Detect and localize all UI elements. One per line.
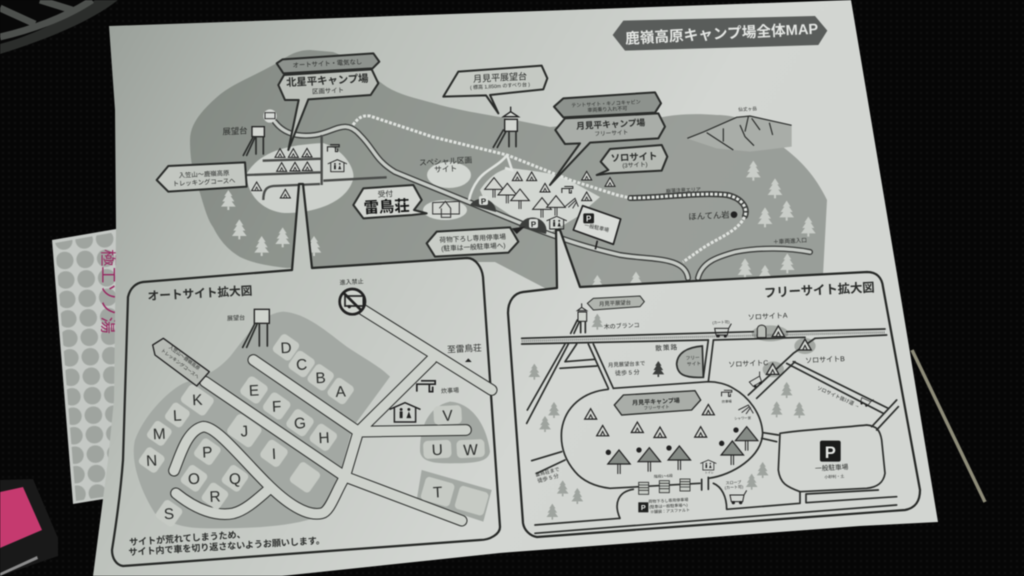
tag: 月見平展望台: 月見平展望台	[599, 298, 632, 308]
tag: site types: 車両乗り入れ不可	[587, 105, 627, 114]
tag: trekking course: 入笠山〜鹿嶺高原	[178, 168, 230, 180]
site letters: I	[271, 446, 277, 463]
tag: 月見平キャンプ場: 月見平キャンプ場	[632, 396, 680, 407]
site letters	[146, 340, 479, 523]
label: shower: シャワー室	[734, 415, 752, 421]
icon: shower	[738, 405, 753, 414]
site letters: K	[192, 392, 204, 409]
tower: 北星平 展望台	[243, 127, 264, 155]
heading: フリーサイト拡大図	[764, 279, 875, 300]
tag: unloading parking	[427, 227, 525, 257]
label: swing: 木のブランコ	[604, 321, 640, 331]
parking semicircles	[470, 196, 547, 234]
tower	[571, 303, 587, 333]
site letters: U	[431, 442, 443, 459]
label: kitchen: 炊事場	[722, 398, 732, 404]
right half map details	[485, 16, 827, 295]
overall map	[190, 50, 827, 296]
label: toilet: トイレ	[705, 470, 714, 475]
tag: 月見平キャンプ場: フリーサイト	[594, 129, 628, 138]
main road	[275, 122, 810, 278]
tents: 月見平	[512, 171, 615, 201]
label: special site: サイト	[434, 164, 457, 174]
site access roads	[527, 338, 898, 473]
unloading parking label: 荷物下ろし専用停車場	[648, 496, 688, 504]
tag: 月見平展望台	[443, 66, 547, 113]
label: walk to 雷鳥荘: 雷鳥荘まで	[534, 466, 560, 479]
label: walk to 雷鳥荘: 徒歩 5 分	[536, 471, 560, 485]
label: slope: スロープ	[725, 479, 741, 485]
label: caution area: 崩落注意エリア	[666, 186, 701, 195]
terrain grey T	[417, 470, 492, 522]
steps	[639, 479, 690, 494]
tag: solo site: (3サイト)	[622, 161, 648, 170]
label: special site: スペシャル区画	[419, 156, 473, 167]
site letters: J	[240, 423, 249, 441]
tag: 雷鳥荘 reception: 雷鳥荘	[363, 197, 410, 217]
icon: shower	[565, 198, 578, 208]
tag: unloading parking: (駐車は一般駐車場へ)	[441, 241, 506, 253]
tower: 月見平展望台	[493, 107, 518, 147]
site letters: V	[442, 407, 454, 425]
sign: general parking: P	[586, 215, 592, 224]
tag: 月見平キャンプ場: フリーサイト	[644, 404, 670, 412]
trees right	[590, 161, 816, 295]
tag: site types	[554, 92, 661, 117]
sign: general parking: 一般駐車場	[584, 222, 610, 234]
label: cart: (カート可)	[712, 319, 730, 325]
terrain: grey area	[190, 50, 827, 296]
tag: 月見平展望台: ( 標高 1,850m のすべり台 )	[470, 81, 530, 91]
tag: trekking course: トレッキングコースへ	[172, 176, 236, 188]
trees left	[221, 190, 321, 256]
label: walk to 雷鳥荘	[534, 466, 560, 485]
tag: auto site note	[277, 53, 379, 73]
site letters: G	[294, 415, 306, 433]
terrain grey main	[134, 312, 390, 528]
title banner: 鹿嶺高原キャンプ場全体MAP	[625, 20, 819, 48]
unloading parking label: ※舗装：アスファルト	[650, 506, 690, 514]
umbrella tents: 月見平	[485, 178, 565, 218]
panel: auto site enlargement	[112, 184, 500, 566]
label: steps: 階段1〜6段	[654, 473, 673, 479]
icon: water point	[417, 381, 435, 392]
tents: 北星平	[252, 148, 312, 198]
site letters: Q	[229, 471, 241, 488]
label: 至雷鳥荘	[447, 342, 482, 362]
note text: サイト内で車を切り返さないようお願いします。	[128, 534, 325, 557]
label: special site	[419, 156, 473, 174]
label: mountain name: 仙丈ヶ岳	[738, 105, 757, 113]
clearing: 雷鳥荘	[423, 200, 467, 220]
icon: no entry truck	[340, 289, 365, 314]
sign: trekking course: トレッキングコースへ	[159, 347, 201, 381]
tag: solo site: ソロサイト	[610, 151, 658, 164]
icon: water point 月見平	[562, 186, 573, 193]
tag: unloading parking: 荷物下ろし専用停車場	[439, 232, 506, 244]
panel: free site enlargement	[508, 230, 920, 537]
auto site roads	[174, 310, 492, 521]
icon: cart B	[859, 395, 874, 408]
label: solo B: ソロサイトB	[805, 355, 845, 365]
icon: toilet	[390, 403, 420, 422]
site letters: L	[173, 407, 183, 425]
label: slope	[725, 479, 744, 490]
label: free site: サイト	[687, 361, 701, 368]
site letters: C	[296, 356, 308, 374]
tag: trekking course	[157, 162, 247, 192]
unloading parking label	[638, 496, 690, 514]
label: 展望台: 展望台	[222, 125, 248, 137]
label: 炊事場: 炊事場	[441, 386, 459, 395]
site letters: F	[272, 398, 282, 416]
site letters: O	[188, 471, 200, 488]
icon: cart C	[747, 372, 766, 389]
label: walk to observatory	[608, 359, 646, 377]
site letters: P	[202, 444, 213, 462]
tag: 雷鳥荘 reception	[353, 185, 427, 218]
clearing: スペシャル区画	[427, 162, 471, 188]
handwritten pink note: 極工ソノ湯	[98, 249, 118, 334]
parking semicircles: P	[481, 197, 487, 206]
site letters: S	[163, 506, 175, 523]
unloading parking label: P	[641, 503, 646, 512]
label: solo C: ソロサイトC	[728, 359, 768, 369]
tag: 北星平キャンプ場	[278, 69, 378, 150]
general parking outline	[778, 425, 885, 492]
lower roads	[535, 477, 897, 533]
tag: 北星平キャンプ場: 区画サイト	[312, 86, 344, 96]
dark tree	[652, 361, 664, 377]
note text: サイトが荒れてしまうため、	[129, 528, 246, 547]
icon: lodge	[433, 201, 459, 217]
pink marker	[0, 479, 58, 576]
heading: オートサイト拡大図	[147, 284, 253, 303]
title banner	[613, 16, 827, 51]
general parking label: 一般駐車場	[815, 462, 849, 473]
icon: cart slope	[730, 490, 747, 504]
site letters: M	[153, 426, 166, 443]
basket corner	[0, 0, 118, 54]
icon: water point 北星平	[327, 145, 339, 152]
label: 進入禁止: 進入禁止	[340, 277, 364, 287]
label: solo A: ソロサイトA	[748, 312, 788, 322]
site letters: B	[315, 370, 326, 387]
general parking label: 小砂利・土	[824, 472, 844, 480]
tag: 月見平キャンプ場: 月見平キャンプ場	[576, 117, 646, 131]
walking trail	[522, 329, 887, 344]
label: free site	[686, 355, 701, 368]
site letters: T	[433, 484, 443, 502]
label: vehicle entrance: ＋車両進入口	[773, 236, 807, 246]
free nook	[677, 346, 703, 377]
auto site map content	[128, 277, 492, 557]
free site map content	[522, 279, 898, 533]
icon: solo A shelter	[757, 325, 766, 338]
tag: 月見平キャンプ場	[614, 391, 701, 415]
label: slope: (カート可)	[725, 484, 744, 490]
tag: solo site	[597, 145, 667, 175]
white stick	[912, 350, 985, 502]
dashed walking trail	[353, 116, 746, 262]
site letters: E	[248, 382, 260, 400]
tents: solo	[766, 326, 811, 374]
tag: site types: テントサイト・キノコキャビン	[571, 99, 641, 109]
trees free site	[528, 314, 805, 520]
site letters: D	[280, 340, 292, 357]
clearing: 北星平	[247, 143, 353, 213]
parking semicircles: P	[531, 220, 537, 229]
tag: 月見平展望台	[587, 296, 644, 310]
label: promenade: 散策路	[655, 342, 678, 353]
campground oval	[561, 382, 763, 488]
terrain grey UVW	[420, 402, 490, 463]
site letters: N	[146, 452, 158, 470]
sign: general parking	[573, 206, 621, 249]
tents: free site	[585, 404, 714, 437]
icon: toilet 月見平	[547, 216, 567, 229]
left half map details	[157, 53, 547, 257]
site letters: A	[335, 383, 347, 401]
icon: cart A	[715, 324, 731, 338]
umbrella tents	[606, 427, 758, 474]
icon: toilet	[700, 460, 716, 470]
general parking label: P	[825, 443, 836, 462]
label: 至雷鳥荘: 至雷鳥荘	[447, 342, 482, 355]
solo patches	[752, 325, 816, 377]
site letters: W	[463, 442, 479, 459]
icon: toilet 北星平	[328, 160, 347, 172]
trail branches	[469, 155, 512, 200]
sign: trekking course	[153, 338, 209, 386]
site letters: R	[209, 488, 221, 506]
icon: water point	[722, 390, 732, 396]
sticker sheet behind the map	[52, 229, 118, 504]
tag: auto site note: オートサイト・電気なし	[292, 57, 362, 69]
general parking label	[815, 441, 849, 480]
tag: 雷鳥荘 reception: 受付	[377, 188, 394, 199]
unloading parking label: (駐車は一般駐車場へ)	[649, 501, 688, 509]
label: free site: フリー	[686, 355, 700, 361]
label: walk to observatory: 徒歩 5 分	[615, 368, 640, 377]
tag: 北星平キャンプ場: 北星平キャンプ場	[286, 73, 369, 89]
tower	[243, 309, 269, 347]
label: ほんてん岩: ほんてん岩	[688, 210, 730, 222]
label: walk to observatory: 月見展望台まで	[608, 359, 646, 369]
tag: 月見平展望台: 月見平展望台	[473, 70, 527, 84]
clearing: 月見平	[480, 168, 600, 233]
no-car icon on road end	[263, 109, 277, 123]
label: 展望台: 展望台	[227, 314, 245, 322]
sign: trekking course: 入笠山〜鹿嶺高原	[167, 344, 202, 372]
site rows of 北星平	[247, 135, 387, 200]
tag: 月見平キャンプ場	[550, 113, 665, 185]
site plots	[137, 332, 489, 528]
mountain	[687, 116, 792, 152]
site letters: H	[318, 430, 330, 447]
label: solo shortcut: ソロサイト抜け道 →	[816, 385, 861, 410]
